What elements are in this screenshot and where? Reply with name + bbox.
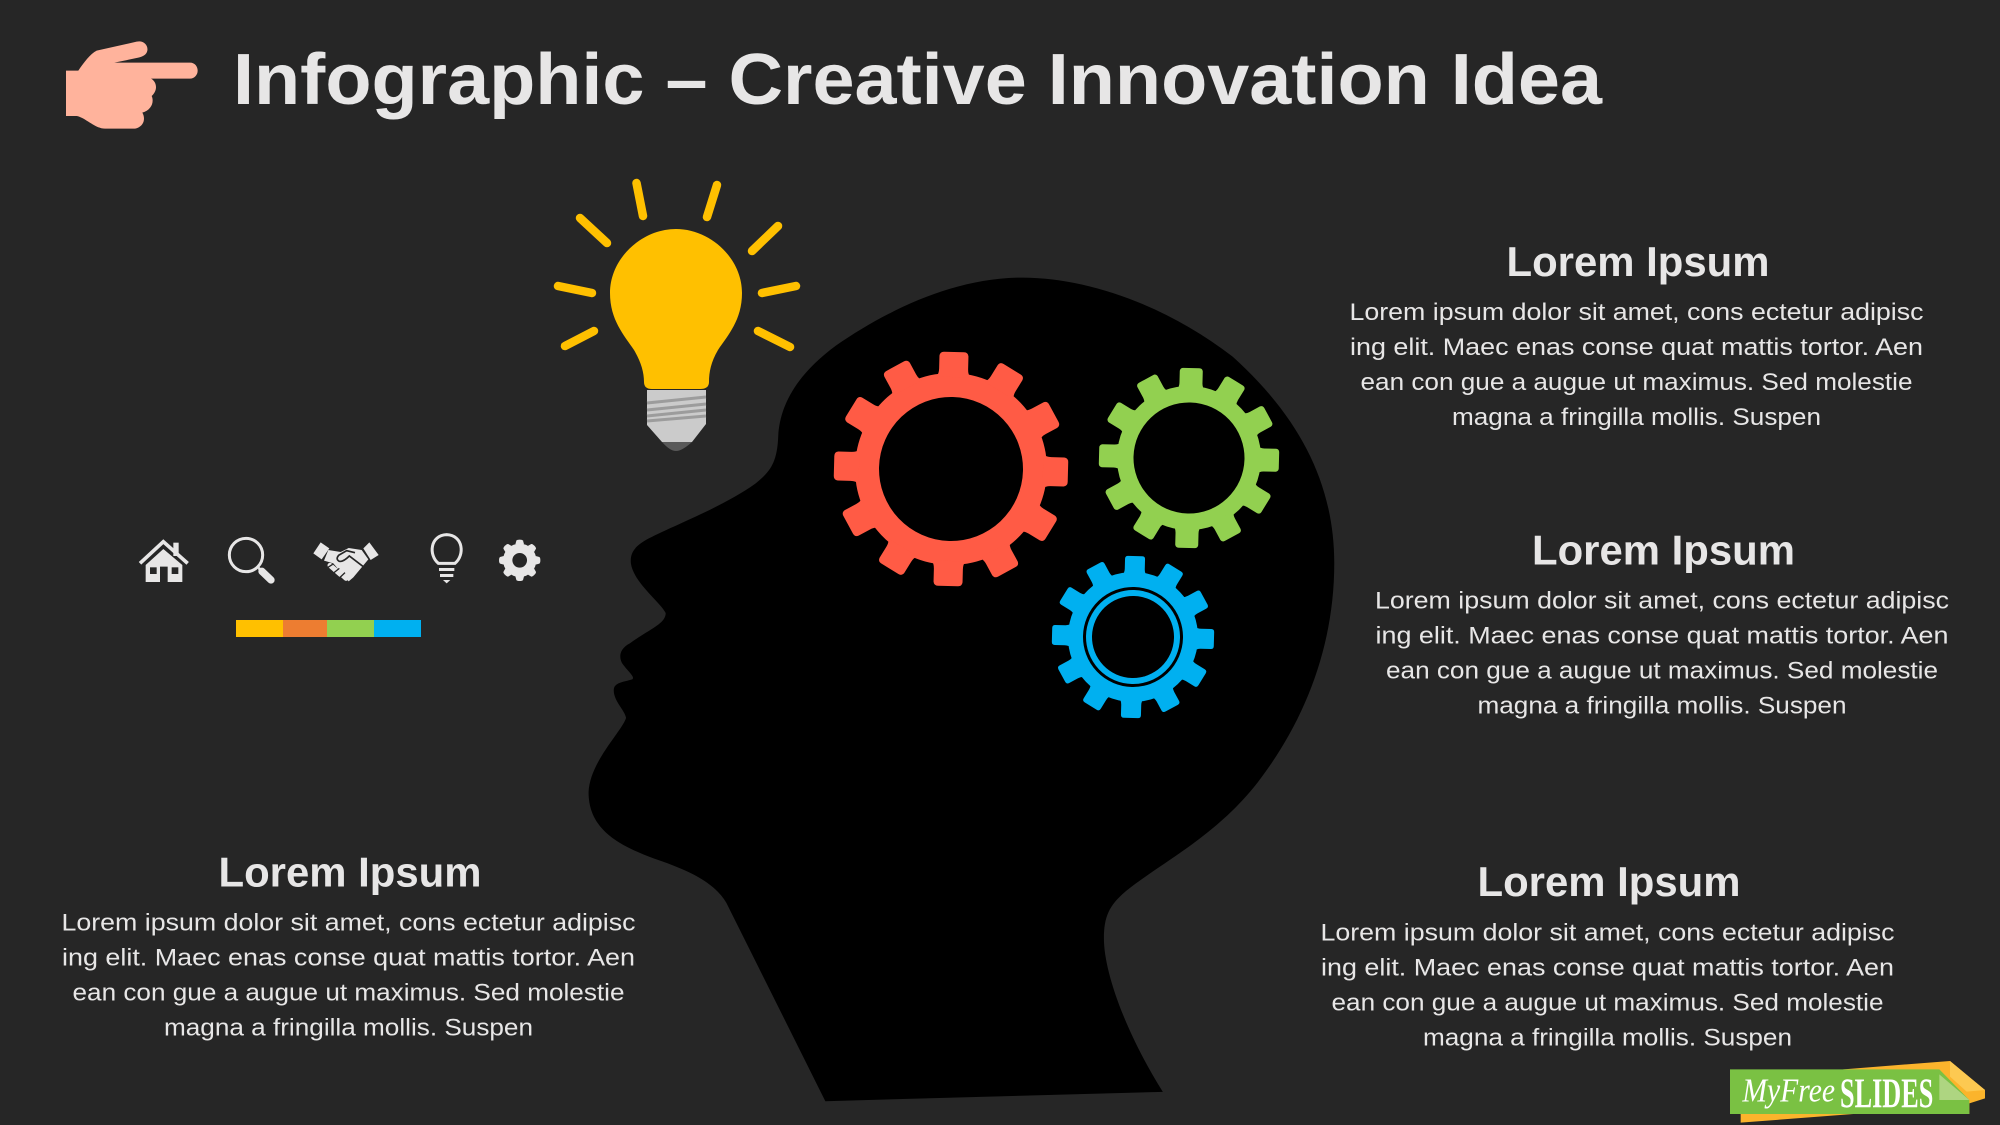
text block: bottom right xyxy=(1320,858,1894,1052)
text block: top right: magna a fringilla mollis. Suspen xyxy=(1452,404,1821,431)
text block: middle right: ing elit. Maec enas conse quat mattis tortor. Aen xyxy=(1376,622,1948,650)
logo: MyFreeSlides: MyFree xyxy=(1741,1073,1835,1110)
text block: middle right: Lorem Ipsum xyxy=(1532,526,1795,574)
text block: top right: Lorem Ipsum xyxy=(1506,238,1770,285)
text block: bottom left: Lorem ipsum dolor sit amet, cons ectetur adipisc xyxy=(62,910,636,936)
text block: top right: Lorem ipsum dolor sit amet, cons ectetur adipisc xyxy=(1350,299,1924,326)
head silhouette xyxy=(589,278,1334,1101)
text block: top right xyxy=(1350,238,1924,431)
text block: bottom right: Lorem ipsum dolor sit amet, cons ectetur adipisc xyxy=(1320,920,1894,946)
text block: bottom right: Lorem Ipsum xyxy=(1478,858,1740,905)
icon: house xyxy=(140,542,188,582)
gear: blue xyxy=(1050,554,1216,720)
logo: MyFreeSlides: SLIDES xyxy=(1840,1071,1933,1118)
icon: magnifier xyxy=(229,538,271,580)
text block: bottom right: magna a fringilla mollis. Suspen xyxy=(1423,1024,1792,1052)
text block: bottom right: ean con gue a augue ut maximus. Sed molestie xyxy=(1332,990,1884,1016)
text block: middle right: magna a fringilla mollis. Suspen xyxy=(1478,692,1846,720)
icon: pointing hand xyxy=(66,41,198,129)
color bar xyxy=(236,620,421,637)
text block: bottom left xyxy=(62,848,636,1042)
text block: bottom left: ean con gue a augue ut maximus. Sed molestie xyxy=(72,980,624,1006)
text block: bottom left: Lorem Ipsum xyxy=(218,848,482,896)
text block: top right: ean con gue a augue ut maximus. Sed molestie xyxy=(1360,369,1912,396)
title: Infographic – Creative Innovation Idea xyxy=(233,40,1603,120)
text block: middle right: ean con gue a augue ut maximus. Sed molestie xyxy=(1386,658,1938,684)
text block: middle right: Lorem ipsum dolor sit amet, cons ectetur adipisc xyxy=(1375,588,1949,614)
gear: red xyxy=(831,349,1071,589)
logo: MyFreeSlides xyxy=(1730,1061,1985,1123)
icon: small gear xyxy=(499,540,540,581)
icon: small bulb xyxy=(432,535,461,583)
icon: handshake xyxy=(313,542,379,581)
text block: bottom left: ing elit. Maec enas conse quat mattis tortor. Aen xyxy=(62,944,635,972)
text block: bottom right: ing elit. Maec enas conse quat mattis tortor. Aen xyxy=(1321,954,1894,982)
text block: middle right xyxy=(1375,526,1949,720)
icon: light bulb with rays xyxy=(558,183,796,451)
text block: top right: ing elit. Maec enas conse quat mattis tortor. Aen xyxy=(1350,334,1923,361)
text block: bottom left: magna a fringilla mollis. Suspen xyxy=(164,1014,533,1042)
gear: green xyxy=(1097,366,1281,550)
